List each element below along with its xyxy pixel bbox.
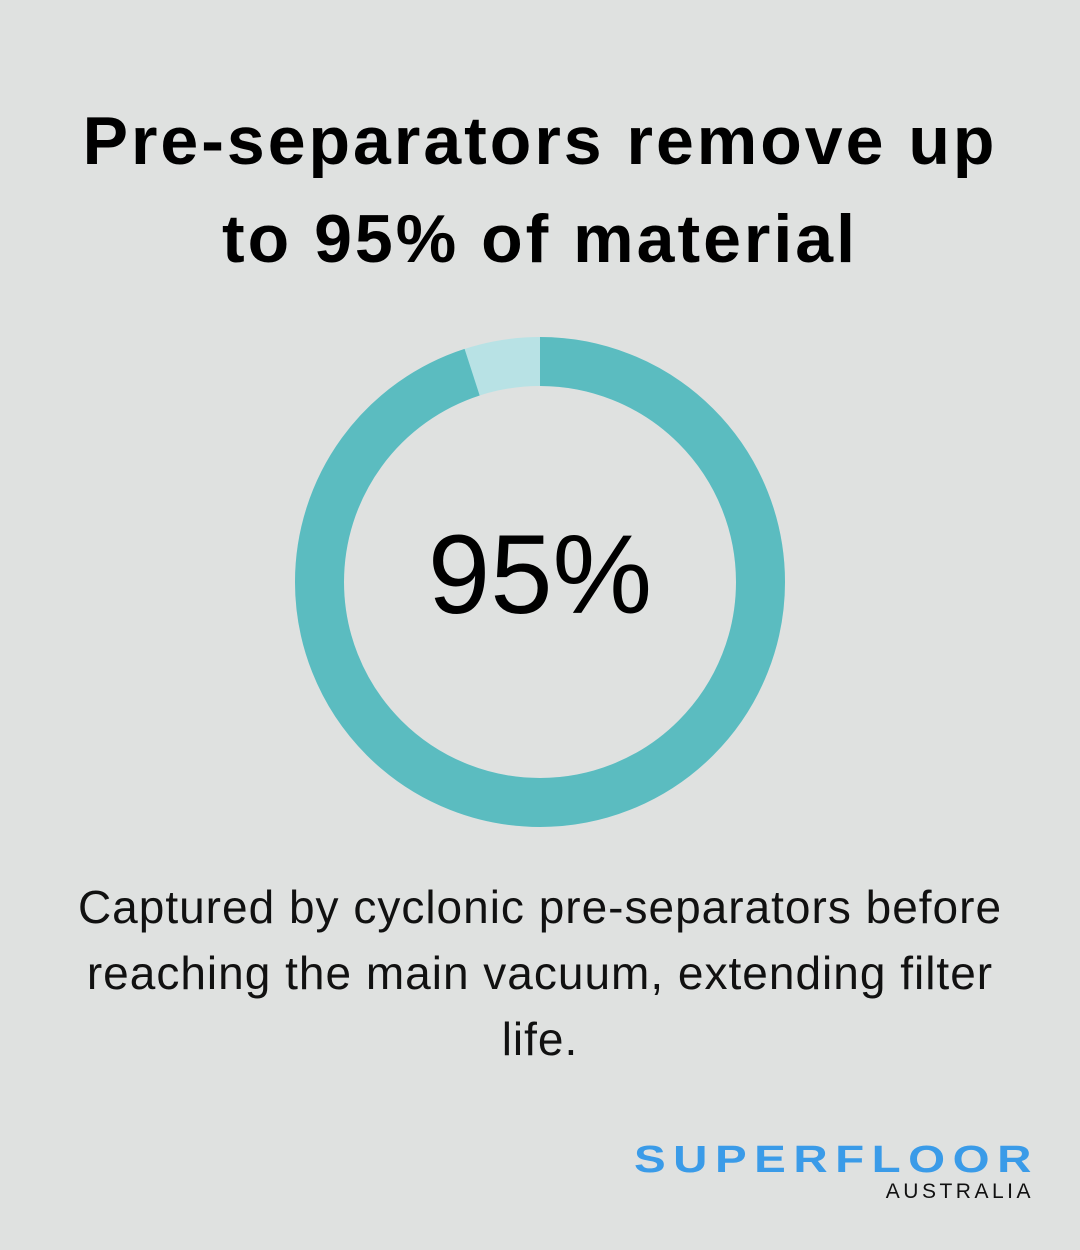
title: Pre-separators remove up: [83, 103, 997, 179]
logo: AUSTRALIA: [886, 1180, 1034, 1203]
logo: [634, 1139, 1039, 1203]
title: to 95% of material: [222, 201, 858, 277]
percentage value: 95%: [428, 512, 652, 637]
description text: Captured by cyclonic pre-separators before reaching the main vacuum, extending filter life.: [78, 881, 1002, 1065]
title: [83, 103, 997, 277]
donut chart: [295, 337, 785, 827]
logo: SUPERFLOOR: [634, 1139, 1039, 1181]
